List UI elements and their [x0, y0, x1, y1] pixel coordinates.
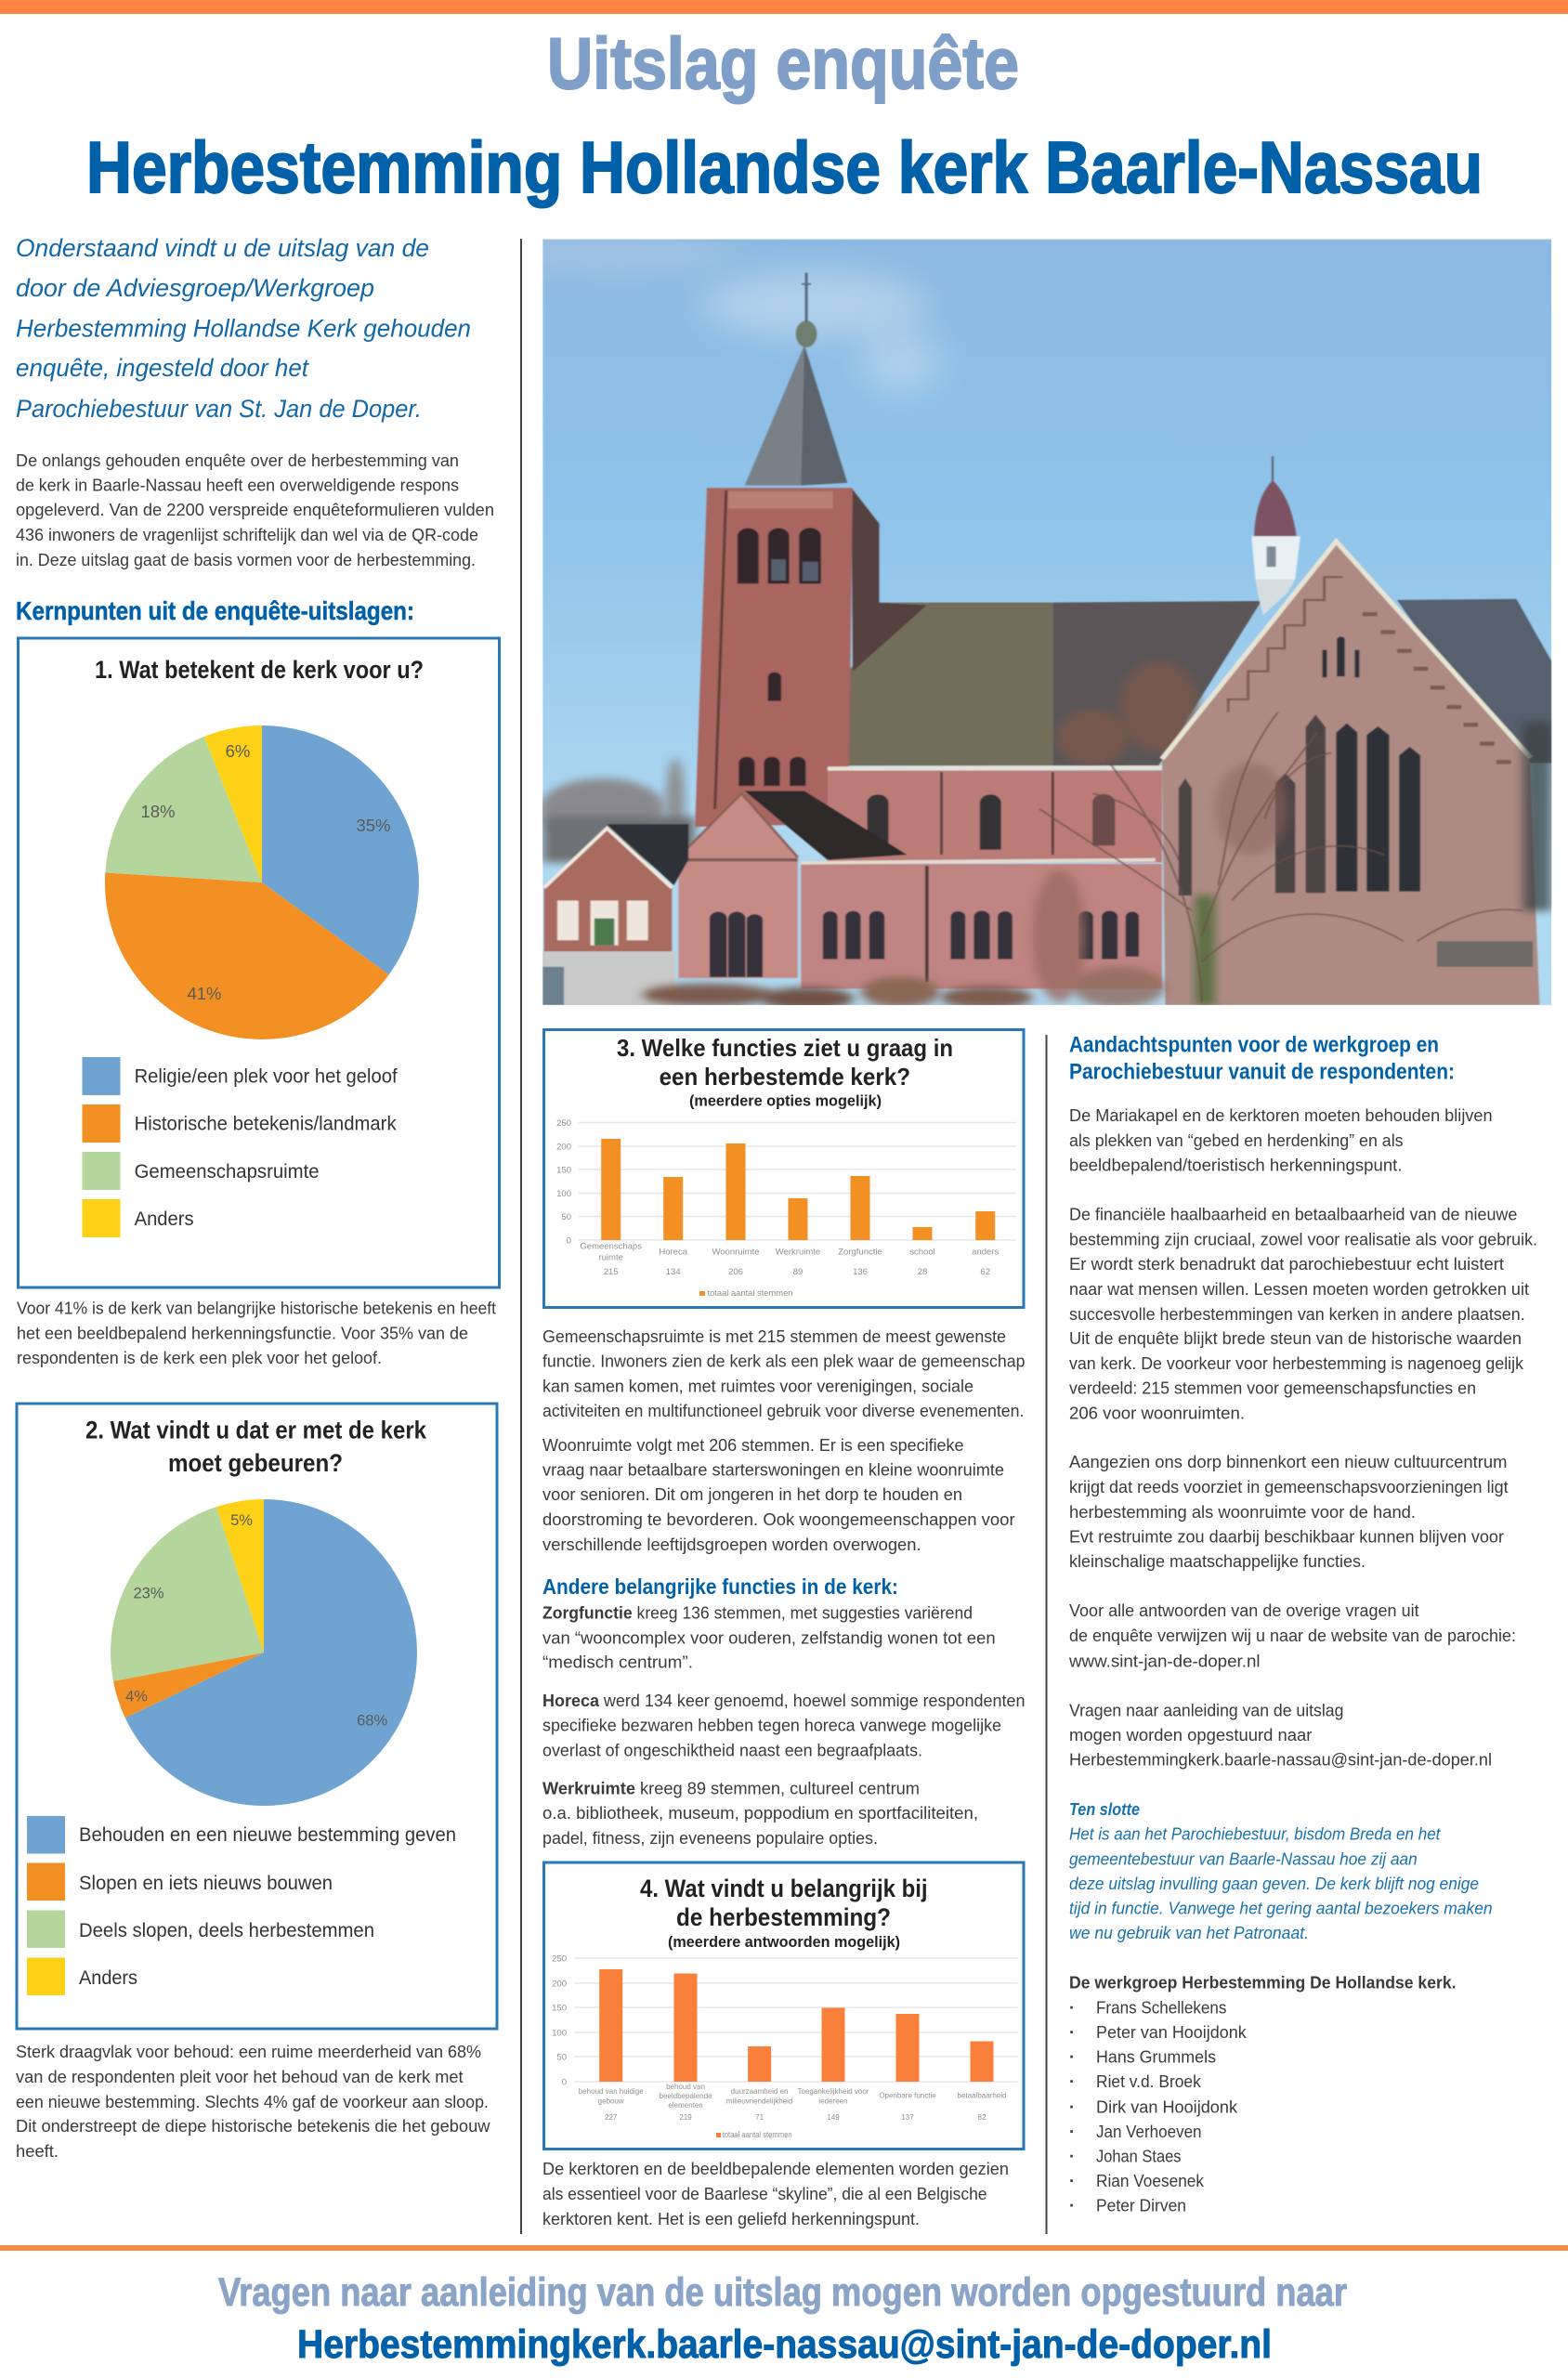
list: werkgroep: Peter Dirven: [1096, 2195, 1186, 2215]
heading: Aandachtspunten: Aandachtspunten voor de werkgroep en: [1069, 1032, 1439, 1057]
list: werkgroep: Jan Verhoeven: [1096, 2122, 1202, 2141]
nave lower wall: [801, 864, 1162, 988]
bar chart 4: 0: [562, 2077, 567, 2088]
list: werkgroep: Peter van Hooijdonk: [1096, 2022, 1247, 2042]
list: werkgroep: ·: [1069, 2195, 1075, 2215]
text: Ten slotte: we nu gebruik van het Patronaat.: [1069, 1923, 1309, 1942]
legend pie 1: Anders: [135, 1209, 194, 1230]
text: Horeca: Horeca werd 134 keer genoemd, hoewel sommige respondenten: [542, 1691, 1026, 1710]
column divider right: [1046, 1035, 1048, 2234]
text: cultuurcentrum: krijgt dat reeds voorziet in gemeenschapsvoorzieningen ligt: [1069, 1477, 1509, 1496]
intro body paragraph: in. Deze uitslag gaat de basis vormen voor de herbestemming.: [16, 550, 476, 569]
pie chart 2: 23%: [133, 1586, 164, 1602]
bar chart 3: 100: [556, 1189, 571, 1199]
caption pie 2: Sterk draagvlak voor behoud: een ruime meerderheid van 68%: [16, 2042, 481, 2061]
caption pie 1: respondenten is de kerk een plek voor het geloof.: [17, 1348, 382, 1367]
main roof: [848, 602, 1053, 766]
top orange bar: [0, 0, 1568, 14]
bar chart 4: 71: [755, 2113, 764, 2122]
bar chart 3: 215: [604, 1267, 619, 1277]
bar chart 3: anders: [972, 1248, 999, 1258]
text: financiële haalbaarheid: De financiële haalbaarheid en betaalbaarheid van de nieuwe: [1069, 1205, 1517, 1224]
pie chart 1: [105, 725, 419, 1039]
question 3 title: [617, 1034, 953, 1109]
text: financiële haalbaarheid: bestemming zijn cruciaal, zowel voor realisatie als voor gebruik.: [1069, 1229, 1537, 1248]
bar chart 4: 137: [901, 2113, 914, 2122]
bar chart 4: Toegankelijkheid voor: [798, 2087, 869, 2096]
list: werkgroep: ·: [1069, 2146, 1075, 2165]
nave right roof: [1397, 599, 1551, 763]
text: financiële haalbaarheid: Uit de enquête blijkt brede steun van de historische waarden: [1069, 1328, 1522, 1348]
list: werkgroep: De werkgroep Herbestemming De Hollandse kerk.: [1069, 1972, 1457, 1992]
text: Horeca: [542, 1691, 1026, 1760]
pie chart 2: 5%: [230, 1512, 253, 1529]
intro body paragraph: 436 inwoners de vragenlijst schriftelijk dan wel via de QR-code: [16, 525, 478, 544]
bar chart 3: 150: [556, 1165, 571, 1176]
bar chart 4: betaalbaarheid: [958, 2091, 1006, 2099]
text: Woonruimte: voor senioren. Dit om jongeren in het dorp te houden en: [542, 1484, 962, 1504]
porch side roof: [745, 791, 907, 860]
bar chart 3: 62: [980, 1267, 990, 1277]
pie chart 2: 4%: [125, 1689, 148, 1705]
bar chart 4: 219: [679, 2113, 692, 2122]
bar chart 3: 0: [567, 1235, 571, 1247]
bottom orange bar: [0, 2245, 1568, 2251]
bar chart 3: school: [909, 1248, 935, 1258]
title: Uitslag enquête: Uitslag enquête: [547, 22, 1019, 104]
list: werkgroep: ·: [1069, 2022, 1075, 2042]
panel: question 3 bar chart: [544, 1029, 1024, 1308]
legend pie 1: [82, 1057, 398, 1237]
text: financiële haalbaarheid: naar wat mensen willen. Lessen moeten worden getrokken uit: [1069, 1279, 1529, 1299]
text: Zorgfunctie: Zorgfunctie kreeg 136 stemmen, met suggesties variërend: [542, 1603, 973, 1623]
legend pie 2: Behouden en een nieuwe bestemming geven: [79, 1824, 456, 1846]
bar chart 4: behoud van huidige: [579, 2087, 644, 2096]
panel: question 2 pie chart: [17, 1404, 497, 2029]
porch: [678, 793, 798, 978]
bushes and bare tree: [642, 984, 775, 1006]
list: werkgroep: Rian Voesenek: [1096, 2171, 1205, 2190]
text: Gemeenschapsruimte: activiteiten en multifunctioneel gebruik voor diverse evenementen.: [542, 1401, 1024, 1420]
text: Mariakapel: beeldbepalend/toeristisch herkenningspunt.: [1069, 1156, 1403, 1174]
list: werkgroep: Hans Grummels: [1096, 2046, 1216, 2066]
text: cultuurcentrum: Aangezien ons dorp binnenkort een nieuw cultuurcentrum: [1069, 1452, 1507, 1471]
text: Werkruimte: padel, fitness, zijn eveneens populaire opties.: [542, 1828, 878, 1848]
text: Gemeenschapsruimte: Gemeenschapsruimte is met 215 stemmen de meest gewenste: [542, 1326, 1006, 1346]
legend pie 1: Historische betekenis/landmark: [135, 1114, 397, 1135]
bar chart 4: milieuvriendelijkheid: [726, 2097, 792, 2105]
bar chart 3: 28: [918, 1267, 927, 1277]
text: Woonruimte: vraag naar betaalbare starterswoningen en kleine woonruimte: [542, 1460, 1004, 1480]
bar chart 4: 200: [552, 1979, 567, 1990]
caption pie 1: Voor 41% is de kerk van belangrijke historische betekenis en heeft: [17, 1299, 496, 1318]
legend pie 2: Slopen en iets nieuws bouwen: [79, 1873, 333, 1894]
bar chart 3: 50: [561, 1212, 571, 1222]
legend pie 2: Anders: [79, 1967, 137, 1989]
bar chart 4: 149: [827, 2113, 840, 2122]
footer question line: Vragen naar aanleiding van de uitslag mogen worden opgestuurd naar: [218, 2270, 1347, 2315]
text: financiële haalbaarheid: succesvolle herbestemmingen van kerken in andere plaatsen.: [1069, 1304, 1525, 1324]
text: website: www.sint-jan-de-doper.nl: [1068, 1651, 1261, 1670]
text: financiële haalbaarheid: 206 voor woonruimten.: [1069, 1403, 1245, 1423]
text: website: Voor alle antwoorden van de overige vragen uit: [1069, 1601, 1419, 1620]
bar chart 3: [556, 1118, 1016, 1299]
bar chart 4: 250: [552, 1954, 567, 1964]
bar chart 3: Woonruimte: [712, 1248, 760, 1258]
heading: Kernpunten: Kernpunten uit de enquête-uitslagen:: [16, 596, 414, 625]
text: cultuurcentrum: Evt restruimte zou daarbij beschikbaar kunnen blijven voor: [1069, 1527, 1504, 1546]
question 4 title: 4. Wat vindt u belangrijk bij: [640, 1875, 928, 1902]
tower windows: [738, 528, 821, 786]
intro body paragraph: De onlangs gehouden enquête over de herbestemming van: [16, 451, 459, 470]
question 3 title: een herbestemde kerk?: [660, 1063, 910, 1091]
bar chart 3: Zorgfunctie: [838, 1248, 882, 1258]
pie chart 1: 18%: [140, 802, 176, 821]
bar chart 4: Openbare functie: [879, 2091, 936, 2099]
list: werkgroep: Riet v.d. Broek: [1096, 2071, 1202, 2091]
small turret: [1271, 456, 1274, 483]
legend pie 2: Deels slopen, deels herbestemmen: [79, 1920, 374, 1941]
text: Ten slotte: Het is aan het Parochiebestuur, bisdom Breda en het: [1069, 1823, 1441, 1843]
intro text in italic blue: door de Adviesgroep/Werkgroep: [16, 274, 374, 302]
text: Mariakapel: als plekken van “gebed en herdenking” en als: [1069, 1130, 1404, 1150]
bar chart 3: 136: [853, 1267, 868, 1277]
text: Werkruimte: Werkruimte kreeg 89 stemmen, cultureel centrum: [542, 1778, 920, 1797]
text: Gemeenschapsruimte: [542, 1326, 1026, 1420]
heading: Aandachtspunten: [1069, 1032, 1455, 1084]
facade windows: [1179, 636, 1420, 895]
list: werkgroep: ·: [1069, 2046, 1075, 2066]
question 4 title: (meerdere antwoorden mogelijk): [668, 1934, 900, 1951]
intro text in italic blue: Onderstaand vindt u de uitslag van de: [16, 234, 429, 262]
text: financiële haalbaarheid: van kerk. De voorkeur voor herbestemming is nagenoeg gelijk: [1069, 1353, 1524, 1373]
footer e-mail line: Herbestemmingkerk.baarle-nassau@sint-jan-de-doper.nl: [297, 2322, 1272, 2367]
text: Mariakapel: De Mariakapel en de kerktoren moeten behouden blijven: [1069, 1105, 1493, 1125]
heading: Andere belangrijke functies: Andere belangrijke functies in de kerk:: [542, 1574, 898, 1599]
intro body paragraph: opgeleverd. Van de 2200 verspreide enquêteformulieren vulden: [16, 500, 494, 519]
text: Horeca: overlast of ongeschiktheid naast een begraafplaats.: [542, 1741, 922, 1760]
intro text in italic blue: Herbestemming Hollandse Kerk gehouden: [16, 314, 471, 342]
list: werkgroep: Frans Schellekens: [1096, 1997, 1226, 2017]
caption pie 2: heeft.: [16, 2141, 59, 2161]
column divider left: [520, 239, 522, 2234]
text: Werkruimte: o.a. bibliotheek, museum, poppodium en sportfaciliteiten,: [542, 1803, 978, 1823]
spire: [745, 346, 804, 485]
legend bar chart 4: totaal aantal stemmen: [723, 2130, 792, 2140]
text: cultuurcentrum: herbestemming als woonruimte voor de hand.: [1069, 1502, 1416, 1522]
text: Werkruimte: [542, 1778, 978, 1848]
question 4 title: [640, 1875, 928, 1951]
text: Ten slotte: gemeentebestuur van Baarle-Nassau hoe zij aan: [1069, 1849, 1418, 1868]
list: werkgroep: ·: [1069, 2097, 1075, 2116]
text: Ten slotte: tijd in functie. Vanwege het gering aantal bezoekers maken: [1069, 1898, 1493, 1917]
text: Woonruimte: doorstroming te bevorderen. Ook woongemeenschappen voor: [542, 1509, 1015, 1529]
bar chart 3: Horeca: [659, 1248, 688, 1258]
intro text in italic blue: [16, 234, 471, 423]
facade gable: [1162, 542, 1539, 1005]
question 3 title: (meerdere opties mogelijk): [689, 1092, 882, 1109]
tower front: [695, 488, 853, 827]
bar chart 4: 100: [552, 2029, 567, 2038]
bar chart 3: 206: [728, 1267, 743, 1277]
text: financiële haalbaarheid: verdeeld: 215 stemmen voor gemeenschapsfuncties en: [1069, 1378, 1476, 1398]
text: vragen e-mail: Vragen naar aanleiding van de uitslag: [1069, 1700, 1343, 1719]
caption bar chart 4: kerktoren kent. Het is een geliefd herkenningspunt.: [542, 2209, 920, 2228]
caption pie 2: Dit onderstreept de diepe historische betekenis die het gebouw: [16, 2116, 490, 2136]
text: Gemeenschapsruimte: functie. Inwoners zien de kerk als een plek waar de gemeenschap: [542, 1352, 1026, 1371]
caption pie 1: het een beeldbepalend herkenningsfunctie. Voor 35% van de: [17, 1324, 468, 1343]
text: Ten slotte: deze uitslag invulling gaan geven. De kerk blijft nog enige: [1069, 1874, 1479, 1893]
text: Woonruimte: verschillende leeftijdsgroepen worden overwogen.: [542, 1535, 921, 1554]
bar chart 4: beeldbepalende: [660, 2092, 712, 2100]
heading: Aandachtspunten: Parochiebestuur vanuit de respondenten:: [1069, 1059, 1455, 1084]
question 2 title: 2. Wat vindt u dat er met de kerk: [85, 1416, 426, 1444]
pie chart 1: 35%: [356, 816, 391, 835]
legend pie 2: [27, 1816, 456, 1995]
text: Zorgfunctie: van “wooncomplex voor ouderen, zelfstandig wonen tot een: [542, 1627, 996, 1648]
intro body paragraph: [16, 451, 494, 569]
pie chart 1: 6%: [226, 741, 250, 761]
bar chart 3: ruimte: [598, 1252, 623, 1263]
bar chart 3: 89: [793, 1267, 803, 1277]
text: vragen e-mail: mogen worden opgestuurd naar: [1069, 1725, 1312, 1744]
bar chart 3: 250: [556, 1118, 571, 1129]
text: financiële haalbaarheid: Er wordt sterk benadrukt dat parochiebestuur echt luistert: [1069, 1254, 1504, 1274]
caption pie 2: [16, 2042, 490, 2161]
list: werkgroep: ·: [1069, 2122, 1075, 2141]
legend pie 1: Religie/een plek voor het geloof: [135, 1066, 398, 1088]
bar chart 4: gebouw: [598, 2097, 624, 2105]
text: financiële haalbaarheid: [1069, 1205, 1537, 1423]
bar chart 3: 200: [556, 1143, 571, 1152]
text: cultuurcentrum: [1069, 1452, 1509, 1571]
bar chart 3: Werkruimte: [776, 1248, 820, 1258]
bar chart 3: 134: [666, 1267, 681, 1277]
bar chart 4: elementen: [668, 2101, 703, 2110]
pie chart 1: 41%: [187, 984, 222, 1003]
question 1 title: 1. Wat betekent de kerk voor u?: [95, 656, 424, 684]
bar chart 4: duurzaamheid en: [731, 2087, 789, 2096]
pie chart 2: [111, 1499, 417, 1806]
caption bar chart 4: De kerktoren en de beeldbepalende elementen worden gezien: [542, 2159, 1009, 2178]
question 2 title: moet gebeuren?: [168, 1449, 343, 1477]
text: Zorgfunctie: “medisch centrum”.: [542, 1652, 693, 1672]
bar chart 4: behoud van: [666, 2083, 705, 2091]
text: Ten slotte: [1069, 1799, 1493, 1942]
background trees: [542, 773, 669, 826]
intro text in italic blue: Parochiebestuur van St. Jan de Doper.: [16, 395, 422, 423]
intro text in italic blue: enquête, ingesteld door het: [16, 354, 309, 382]
caption pie 2: van de respondenten pleit voor het behoud van de kerk met: [16, 2067, 464, 2086]
bar chart 4: [552, 1954, 1018, 2140]
legend pie 1: Gemeenschapsruimte: [135, 1161, 320, 1182]
bar chart 4: 82: [978, 2113, 987, 2122]
bar chart 4: 227: [605, 2113, 618, 2122]
text: Zorgfunctie: [542, 1603, 996, 1672]
text: website: [1068, 1601, 1516, 1670]
text: website: de enquête verwijzen wij u naar de website van de parochie:: [1069, 1626, 1516, 1645]
list: werkgroep: [1069, 1972, 1457, 2215]
caption bar chart 4: als essentieel voor de Baarlese “skyline”, die al een Belgische: [542, 2184, 987, 2203]
question 2 title: [85, 1416, 426, 1477]
bar chart 4: iedereen: [818, 2097, 848, 2105]
text: cultuurcentrum: kleinschalige maatschappelijke functies.: [1069, 1551, 1365, 1571]
panel: question 1 pie chart: [19, 638, 500, 1287]
lower windows: [710, 910, 1139, 977]
list: werkgroep: ·: [1069, 2071, 1075, 2091]
pie chart 2: 68%: [357, 1713, 388, 1730]
bar chart 3: Gemeenschaps: [580, 1241, 642, 1252]
text: Gemeenschapsruimte: kan samen komen, met ruimtes voor verenigingen, sociale: [542, 1377, 973, 1395]
text: Mariakapel: [1069, 1105, 1493, 1174]
list: werkgroep: Johan Staes: [1096, 2146, 1182, 2165]
text: Ten slotte: Ten slotte: [1069, 1799, 1140, 1819]
side house: [607, 824, 688, 885]
bar chart 4: 50: [556, 2053, 567, 2062]
tower side: [852, 488, 927, 672]
question 3 title: 3. Welke functies ziet u graag in: [617, 1034, 953, 1062]
intro body paragraph: de kerk in Baarle-Nassau heeft een overweldigende respons: [16, 476, 459, 495]
text: vragen e-mail: [1069, 1700, 1492, 1769]
list: werkgroep: ·: [1069, 1997, 1075, 2017]
panel: question 4 bar chart: [544, 1862, 1024, 2149]
text: Horeca: specifieke bezwaren hebben tegen horeca vanwege mogelijke: [542, 1716, 1001, 1735]
bar chart 4: 150: [552, 2003, 567, 2014]
list: werkgroep: ·: [1069, 2171, 1075, 2190]
legend bar chart 3: totaal aantal stemmen: [708, 1288, 793, 1299]
text: Woonruimte: Woonruimte volgt met 206 stemmen. Er is een specifieke: [542, 1435, 964, 1455]
text: Woonruimte: [542, 1435, 1015, 1554]
text: vragen e-mail: Herbestemmingkerk.baarle-nassau@sint-jan-de-doper.nl: [1069, 1749, 1492, 1769]
question 4 title: de herbestemming?: [676, 1903, 891, 1931]
caption bar chart 4: [542, 2159, 1009, 2228]
list: werkgroep: Dirk van Hooijdonk: [1096, 2097, 1238, 2116]
caption pie 1: [17, 1299, 496, 1367]
nave upper wall: [828, 771, 1162, 862]
caption pie 2: een nieuwe bestemming. Slechts 4% gaf de voorkeur aan sloop.: [16, 2092, 489, 2111]
photo: church: [477, 233, 1551, 1010]
